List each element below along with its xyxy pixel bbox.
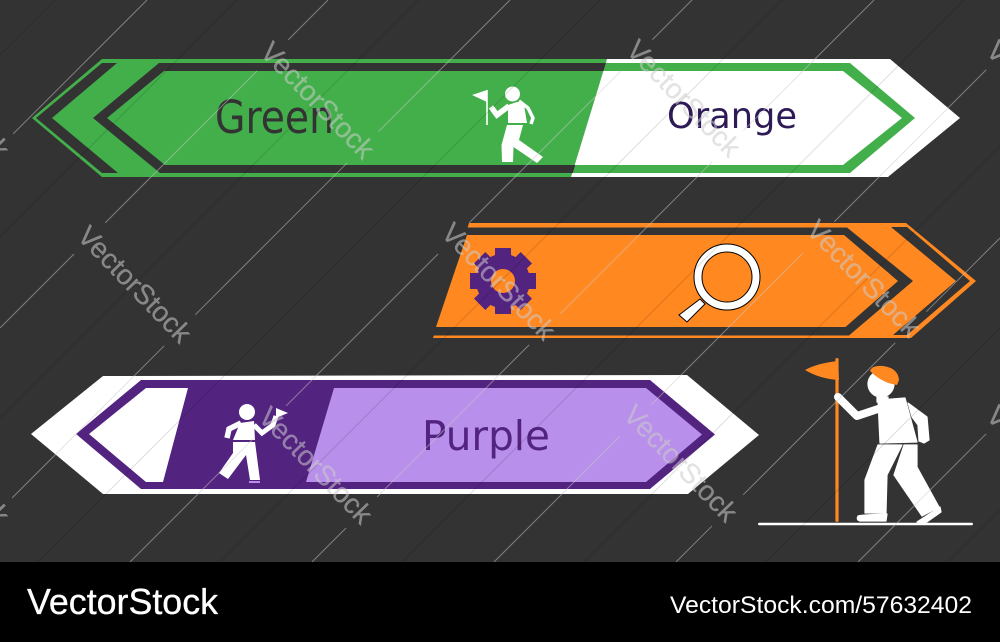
- ground line: [758, 523, 973, 525]
- watermark text: VectorStock: [253, 401, 379, 531]
- footer logo text: VectorStock: [27, 581, 219, 622]
- panel: green and white arrow: [32, 59, 960, 177]
- watermark text: VectorStock: [621, 34, 747, 164]
- watermark text: VectorStock: [801, 214, 927, 344]
- panel: orange arrow: [425, 223, 976, 338]
- watermark text: VectorStock: [255, 36, 381, 166]
- footer image id: VectorStock.com/57632402: [670, 592, 972, 619]
- footer bar: [0, 562, 1000, 642]
- watermark text: VectorStock: [72, 220, 198, 350]
- icon: purple gear: [470, 248, 536, 314]
- icon: magnifying glass: [679, 248, 756, 322]
- orange cap: [870, 366, 899, 385]
- watermark text: VectorStock: [618, 399, 744, 529]
- label: Green: Green: [215, 91, 334, 144]
- illustration: person planting flag: [758, 358, 973, 525]
- icon: orange flag: [805, 358, 839, 522]
- figure: [838, 366, 941, 524]
- label: Purple: Purple: [422, 412, 550, 460]
- label: Orange: Orange: [667, 96, 797, 137]
- watermark text: VectorStock: [436, 217, 562, 347]
- watermark text: [0, 34, 1000, 532]
- icon: hiker with flag: [472, 86, 543, 163]
- panel: purple arrow: [31, 375, 759, 494]
- icon: walker with flag: [219, 404, 288, 483]
